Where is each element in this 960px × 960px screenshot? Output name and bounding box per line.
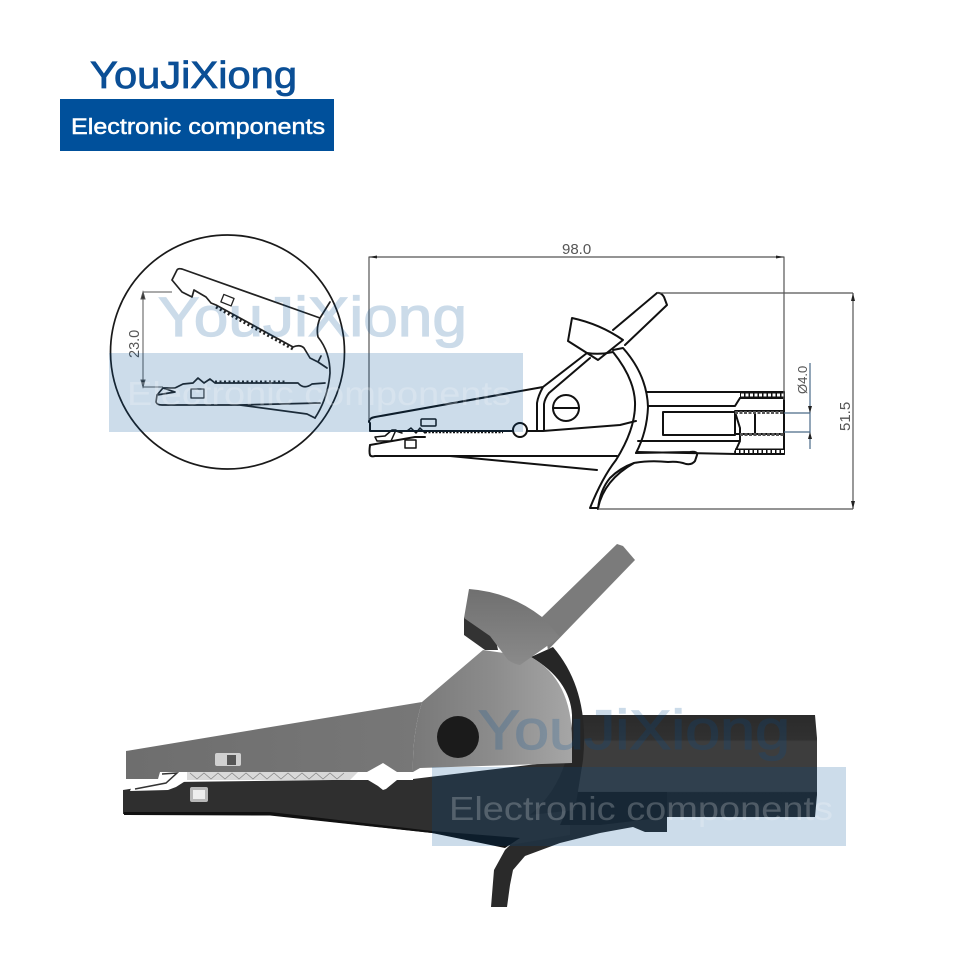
dimension 98.0: 98.0 [562,241,591,258]
watermark: drawing area: YouJiXiong [158,285,467,348]
jaw slots [421,419,436,426]
open upper jaw [172,269,330,418]
jaw hub [413,650,572,772]
thumb wedge underside [464,617,498,650]
jaw teeth [407,428,425,433]
lower jaw shadow [124,812,520,848]
knurled band top [740,392,784,398]
lower jaw teeth [215,380,287,384]
lower jaw [370,437,617,470]
dimension value: 23.0 [127,330,143,358]
lower jaw slot [191,389,204,398]
technical drawing: clip side view [369,293,784,509]
upper jaw teeth [216,307,293,349]
watermark: drawing area: Electronic components [127,375,511,412]
trigger grip [598,452,697,509]
watermark: photo area: YouJiXiong [478,698,790,761]
tip contacts [135,773,177,789]
knurled band bottom [735,448,784,454]
dimension 51.5: 51.5 [837,402,854,431]
watermark: photo area: Electronic components [449,790,833,827]
bore knurl [735,412,784,434]
lower jaw window [190,787,208,802]
upper jaw slot [221,294,234,306]
trigger shadow under grip [560,792,667,825]
pivot screw [553,395,579,421]
serrated jaw band [130,773,413,791]
upper jaw window [215,753,241,766]
thumb tab [613,293,667,345]
lower jaw [156,378,325,418]
dimension 23.0 [127,292,172,387]
upper jaw [126,702,422,779]
product photo: black and grey clip [123,544,817,907]
overall dimensions [369,241,855,509]
rear body [491,715,817,907]
barrel bore [735,392,784,454]
circular detail: jaw opening 23.0 [110,235,344,469]
jaw pivot notch [513,423,527,437]
jaw teeth [187,772,358,780]
rear barrel [637,392,784,454]
thumb tab [542,544,635,650]
dimension 51.5 [598,293,855,509]
banner text: Electronic components [71,114,325,139]
thumb wedge [568,318,623,360]
watermark: photo area [432,698,846,846]
thumb wedge [464,589,560,665]
jaw tip detail [375,430,402,441]
spring arc [530,647,584,815]
pivot hole [437,716,479,758]
dimension diameter 4.0 [784,363,812,449]
dimension 98.0 [369,241,784,420]
brand logo [60,55,334,151]
spring arm [587,348,648,508]
upper jaw [369,353,636,431]
brand name: YouJiXiong [90,55,297,97]
lower jaw [123,760,570,845]
brand banner [60,99,334,151]
dimension diameter 4.0: Ø4.0 [795,366,810,394]
detail circle [110,235,344,469]
watermark: drawing area [109,285,523,432]
